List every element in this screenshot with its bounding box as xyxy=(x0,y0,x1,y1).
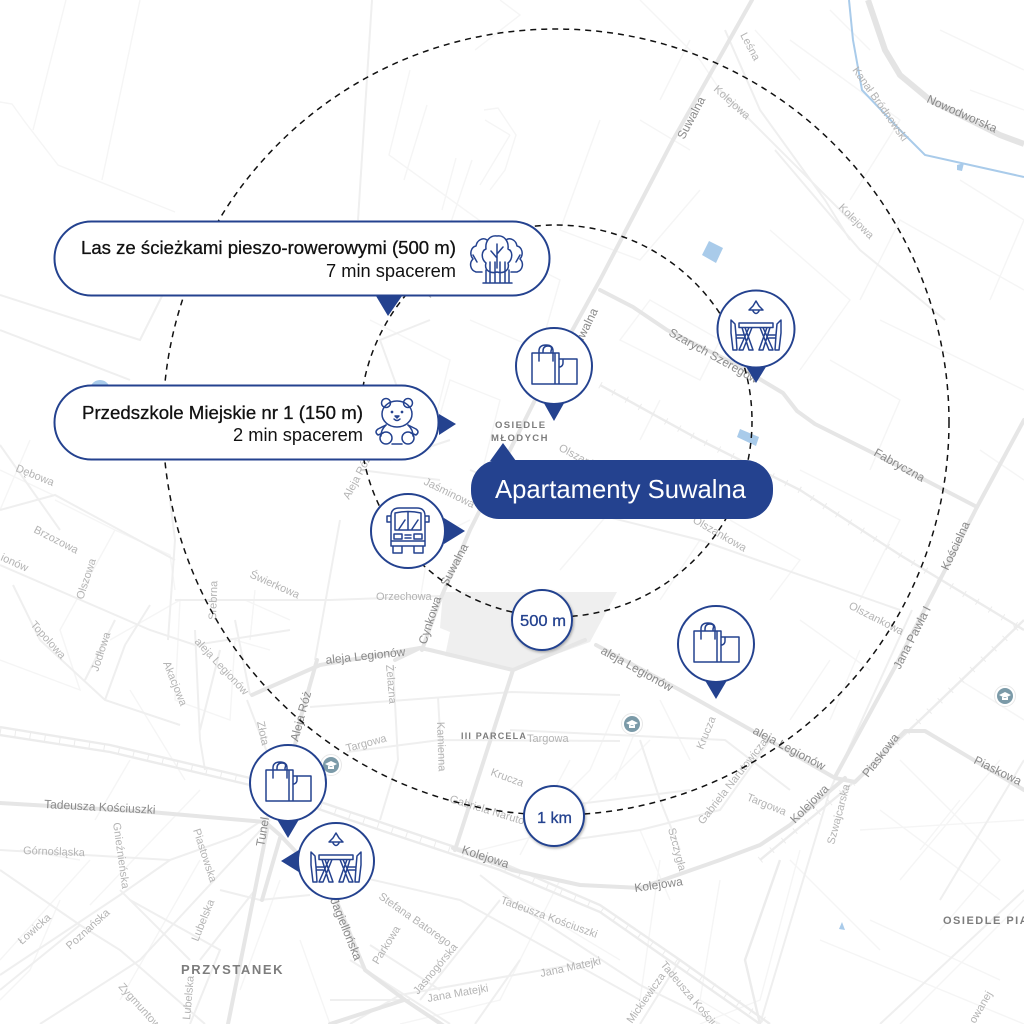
street labels: aleja Legionów xyxy=(751,723,828,773)
street labels: Piastowska xyxy=(190,827,219,885)
radius circles xyxy=(163,29,949,815)
street labels: Akacjowa xyxy=(160,660,189,709)
callout: forest: Las ze ścieżkami pieszo-rowerowymi (500 m) xyxy=(81,237,456,258)
street labels: aleja Legionów xyxy=(599,643,676,695)
street labels: Olszankowa xyxy=(690,514,749,555)
street labels: Poznańska xyxy=(64,906,113,952)
street labels: Fabryczna xyxy=(872,445,928,485)
street labels: Jaśminowa xyxy=(422,476,477,511)
street labels: Lubelska xyxy=(190,897,218,943)
street labels: Suwalna xyxy=(674,94,708,141)
street labels: Kolejowa xyxy=(633,874,684,895)
street labels: Aleja xyxy=(422,271,438,299)
street labels: Suwalna xyxy=(568,306,601,353)
street labels: Krucza xyxy=(695,714,719,751)
street labels: Dębowa xyxy=(14,463,57,489)
street labels: Suwalna xyxy=(437,541,471,588)
street labels: Targowa xyxy=(345,732,389,755)
street labels: Targowa xyxy=(527,733,569,745)
street labels: OSIEDLE xyxy=(495,420,547,431)
icon: bus xyxy=(387,508,429,553)
school markers xyxy=(320,686,1016,776)
street labels: Krucza xyxy=(489,767,526,790)
canal and water xyxy=(849,0,1024,177)
street labels: Jagiellońska xyxy=(327,896,365,963)
pin: shop north xyxy=(516,328,592,421)
street labels: Gabriela Narutowicza xyxy=(696,736,771,827)
street labels: Aleja Róż xyxy=(287,690,314,743)
street labels: Kanał Bródnowski xyxy=(850,65,910,144)
pin: restaurant north-east xyxy=(718,290,794,383)
street labels: Olszankowa xyxy=(557,442,616,481)
street labels: Jodłowa xyxy=(89,630,114,673)
street labels: Szarych Szeregów xyxy=(667,325,761,386)
icon: trees xyxy=(471,236,522,283)
street labels: Gabriela Narutowicza xyxy=(448,793,553,836)
distance badge: 500 m: 500 m xyxy=(520,613,566,630)
callout: kindergarten xyxy=(54,386,456,460)
street labels: Jasnogórska xyxy=(411,941,461,997)
distance badge: 500 m xyxy=(512,590,572,650)
main label: Apartamenty Suwalna xyxy=(471,443,773,519)
callout: kindergarten: Przedszkole Miejskie nr 1 (150 m) xyxy=(82,402,363,423)
callout: forest: 7 min spacerem xyxy=(326,260,456,281)
icon: teddy bear xyxy=(376,398,418,444)
street labels: Kościelna xyxy=(938,519,973,572)
street labels: Tadeusza Kościuszki xyxy=(499,895,599,941)
street labels: Nowodworska xyxy=(925,92,1000,136)
plaza area xyxy=(440,592,617,670)
street labels: Gnieźnieńska xyxy=(110,822,131,890)
street labels: Jana Pawła I xyxy=(890,604,934,671)
street labels: Szwajcarska xyxy=(825,782,853,846)
street labels: Targowa xyxy=(745,792,789,819)
callout: kindergarten: 2 min spacerem xyxy=(233,424,363,445)
street labels: Górnośląska xyxy=(23,845,86,859)
street labels: Kolejowa xyxy=(460,843,511,871)
street labels: Szczygła xyxy=(665,827,688,873)
street labels: Łowicka xyxy=(16,911,54,947)
street labels: PRZYSTANEK xyxy=(181,962,284,977)
railway lines xyxy=(0,385,1024,1024)
distance badge: 1 km: 1 km xyxy=(537,810,572,827)
street labels: Parkowa xyxy=(370,923,404,967)
street labels: Olszowa xyxy=(74,556,99,601)
street labels: Piaskowa xyxy=(972,753,1024,788)
distance badge: 1 km xyxy=(524,786,584,846)
street labels: Leśna xyxy=(737,31,762,64)
street labels: Kolejowa xyxy=(836,202,877,242)
street labels: Świerkowa xyxy=(248,568,302,602)
street labels: MŁODYCH xyxy=(491,433,549,444)
street labels: Jana Matejki xyxy=(539,955,602,980)
street labels: Złota xyxy=(254,720,271,747)
pin: shop south-east xyxy=(678,606,754,699)
street labels: Żelazna xyxy=(383,664,399,705)
street labels: Jana Matejki xyxy=(426,982,489,1005)
street labels: Lubelska xyxy=(181,974,197,1020)
callout: forest xyxy=(54,222,550,316)
pin: bus stop xyxy=(371,494,465,568)
street labels: Kolejowa xyxy=(711,83,753,123)
street labels: Kamienna xyxy=(434,722,448,772)
street labels: aleja Legionów xyxy=(325,645,406,667)
street labels: Orzechowa xyxy=(376,591,433,603)
street labels: Tadeusza Kościuszki xyxy=(44,797,156,817)
street labels: Aleja Róż xyxy=(341,454,374,501)
street labels: Brzozowa xyxy=(32,524,81,557)
street labels: Kolejowa xyxy=(787,782,832,826)
street labels: III PARCELA xyxy=(461,731,527,741)
street labels: Stefana Batorego xyxy=(376,891,453,950)
main label: Apartamenty Suwalna: Apartamenty Suwalna xyxy=(495,474,747,504)
street labels: aleja Legionów xyxy=(192,636,251,698)
street labels: Olszankowa xyxy=(847,600,906,638)
street labels: Srebrna xyxy=(207,580,220,620)
street labels: Cynkowa xyxy=(416,594,444,646)
pin: shop south-west xyxy=(250,745,326,838)
street labels: Piaskowa xyxy=(859,731,902,780)
pin: restaurant south-west xyxy=(281,823,374,899)
street labels: Tunel xyxy=(253,816,272,848)
street labels: Topolowa xyxy=(28,619,68,662)
